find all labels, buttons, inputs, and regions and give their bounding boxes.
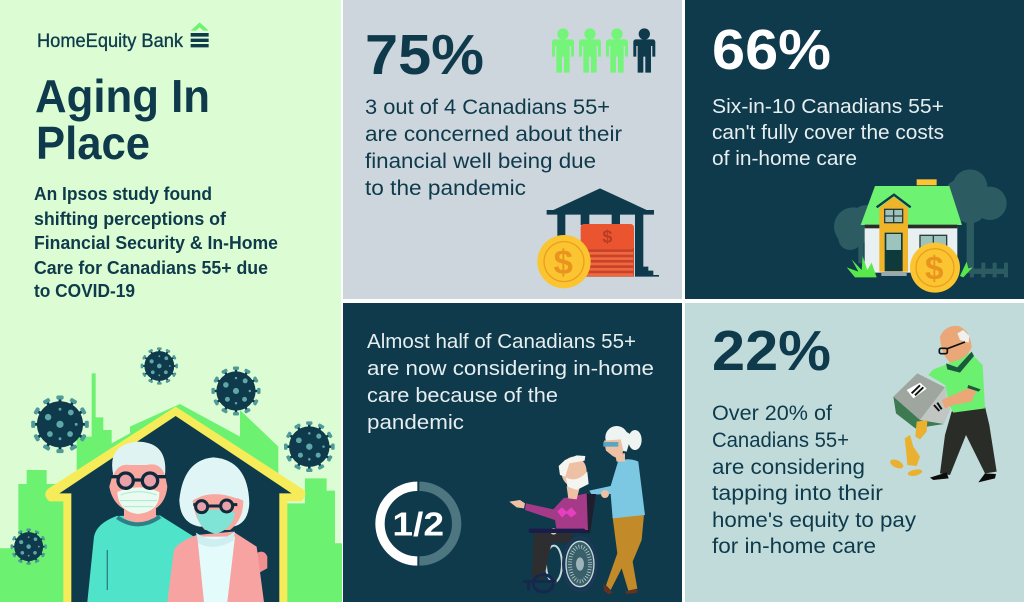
panel: 66 percent background <box>685 0 1024 299</box>
text: considering in-home care: Almost half of Canadians 55+ <box>367 330 636 353</box>
stat: 75%: 75% <box>365 23 484 87</box>
mask <box>117 487 159 514</box>
city skyline <box>0 373 342 602</box>
intro text block: Care for Canadians 55+ due <box>34 258 268 278</box>
mask pleats <box>120 492 157 507</box>
text: concern about financial well being <box>365 96 622 200</box>
head <box>109 462 167 514</box>
illustration: couple in masks at home with viruses <box>0 347 342 602</box>
woman <box>167 457 267 602</box>
person 4 <box>633 28 655 73</box>
icon: bank with money and coin <box>537 188 659 288</box>
legs <box>532 533 573 578</box>
text: tapping into home equity: tapping into their <box>712 482 883 505</box>
hair <box>957 330 969 343</box>
text: cost of in-home care <box>712 95 944 170</box>
virus 4 <box>284 421 335 472</box>
text: tapping into home equity: Canadians 55+ <box>712 429 849 452</box>
side window <box>920 235 947 249</box>
panel: 22 percent background <box>685 303 1024 602</box>
glasses <box>111 473 166 488</box>
doorstep <box>881 272 907 276</box>
text: cost of in-home care: of in-home care <box>712 147 857 170</box>
text: considering in-home care: care because of the <box>367 384 558 407</box>
text: concern about financial well being: 3 out of 4 Canadians 55+ <box>365 96 610 119</box>
top <box>589 459 645 518</box>
fringe <box>195 483 237 498</box>
coins <box>889 420 927 477</box>
dormer and door frame <box>879 197 908 272</box>
person 3 <box>606 28 628 73</box>
hand on shoulder <box>252 552 267 573</box>
door <box>885 233 903 271</box>
intro text block <box>34 184 278 301</box>
hair <box>179 457 249 527</box>
wheelchair back <box>581 494 596 533</box>
arm <box>942 387 977 408</box>
hair <box>605 426 642 452</box>
dormer roof line <box>877 195 911 207</box>
person 2 <box>579 28 601 73</box>
neck <box>567 487 580 499</box>
head <box>561 457 587 487</box>
bank building <box>547 188 659 277</box>
intro text block: Financial Security & In-Home <box>34 233 278 253</box>
text: tapping into home equity <box>712 402 917 558</box>
dormer window <box>885 209 903 223</box>
text: tapping into home equity: Over 20% of <box>712 402 832 425</box>
hair <box>559 455 585 477</box>
trousers <box>940 407 997 475</box>
remaining half <box>419 486 457 561</box>
neck <box>124 505 156 522</box>
virus 5 <box>11 529 47 565</box>
house outline <box>45 407 305 602</box>
cardigan <box>167 532 264 602</box>
logo wordmark: HomeEquity Bank <box>37 30 183 52</box>
collar <box>196 531 235 547</box>
shoes <box>930 472 996 482</box>
shoes <box>603 584 637 594</box>
wheelchair <box>523 537 597 592</box>
value: 1/2 <box>392 506 444 543</box>
text: concern about financial well being: financial well being due <box>365 150 596 173</box>
intro text block: An Ipsos study found <box>34 184 212 204</box>
virus 2 <box>141 347 178 385</box>
house interior <box>59 416 292 602</box>
house box <box>893 373 950 428</box>
title <box>35 70 210 169</box>
rear small wheel <box>546 546 562 582</box>
sleeve <box>967 385 981 392</box>
chimney <box>917 179 937 185</box>
neck <box>615 453 625 462</box>
panel: intro background <box>0 0 341 602</box>
lap hand <box>550 528 557 535</box>
walls <box>865 227 957 273</box>
virus 3 <box>211 366 261 416</box>
text: concern about financial well being: are concerned about their <box>365 123 622 146</box>
hair <box>112 442 165 475</box>
right grass <box>960 262 973 277</box>
legs <box>606 515 644 591</box>
glasses <box>939 342 965 354</box>
glasses <box>603 442 618 447</box>
text: tapping into home equity: are considering <box>712 456 865 479</box>
shirt <box>928 353 985 413</box>
chart: one half donut <box>380 486 457 561</box>
illustration: man pouring coins out of a house <box>889 326 997 482</box>
text: considering in-home care: are now considering in-home <box>367 357 654 380</box>
lap armrest <box>529 529 585 533</box>
coin: $ <box>554 244 573 282</box>
sweater seam <box>105 550 109 590</box>
logo mark <box>191 22 209 47</box>
stat: 66%: 66% <box>712 18 831 82</box>
text: concern about financial well being: to the pandemic <box>365 177 526 200</box>
hand <box>509 500 525 508</box>
title: Place <box>36 117 150 169</box>
title: Aging In <box>35 70 210 122</box>
filled half <box>380 486 417 561</box>
person 1 <box>552 28 574 73</box>
stat: 22%: 22% <box>712 319 831 383</box>
text: cost of in-home care: can't fully cover the costs <box>712 121 944 144</box>
trees <box>834 169 1007 273</box>
illustration: house with coin <box>834 169 1008 293</box>
money stack: $ <box>602 227 612 247</box>
sweater pattern <box>557 507 577 517</box>
text: tapping into home equity: home's equity to pay <box>712 509 917 532</box>
text: cost of in-home care: Six-in-10 Canadians 55+ <box>712 95 944 118</box>
man <box>509 455 589 578</box>
collar <box>117 517 160 524</box>
illustration: woman pushing man in wheelchair <box>509 426 645 594</box>
fence <box>970 263 1008 277</box>
collar <box>946 352 974 373</box>
man <box>87 442 197 602</box>
roof <box>861 186 962 225</box>
grass <box>847 256 877 277</box>
eaves <box>865 225 957 228</box>
beard <box>566 472 589 490</box>
coin: $ <box>925 251 944 288</box>
face <box>604 439 623 460</box>
hand <box>601 490 609 498</box>
face <box>193 494 243 530</box>
woman <box>589 426 645 594</box>
head <box>940 326 972 363</box>
glasses <box>193 500 237 513</box>
sweater and arm <box>525 493 588 530</box>
panel: 75 percent background <box>343 0 682 299</box>
coin <box>910 243 960 293</box>
panel: one in two background <box>343 303 682 602</box>
text: tapping into home equity: for in-home care <box>712 535 876 558</box>
text: considering in-home care: pandemic <box>367 411 464 434</box>
mask <box>197 510 235 534</box>
logo: HomeEquity Bank <box>37 22 209 52</box>
text: considering in-home care <box>367 330 654 434</box>
intro text block: to COVID-19 <box>34 281 135 301</box>
virus 1 <box>31 396 89 453</box>
intro text block: shifting perceptions of <box>34 209 227 229</box>
sweater <box>87 515 197 602</box>
icon: four people, three highlighted <box>552 28 655 73</box>
blouse <box>197 537 235 602</box>
